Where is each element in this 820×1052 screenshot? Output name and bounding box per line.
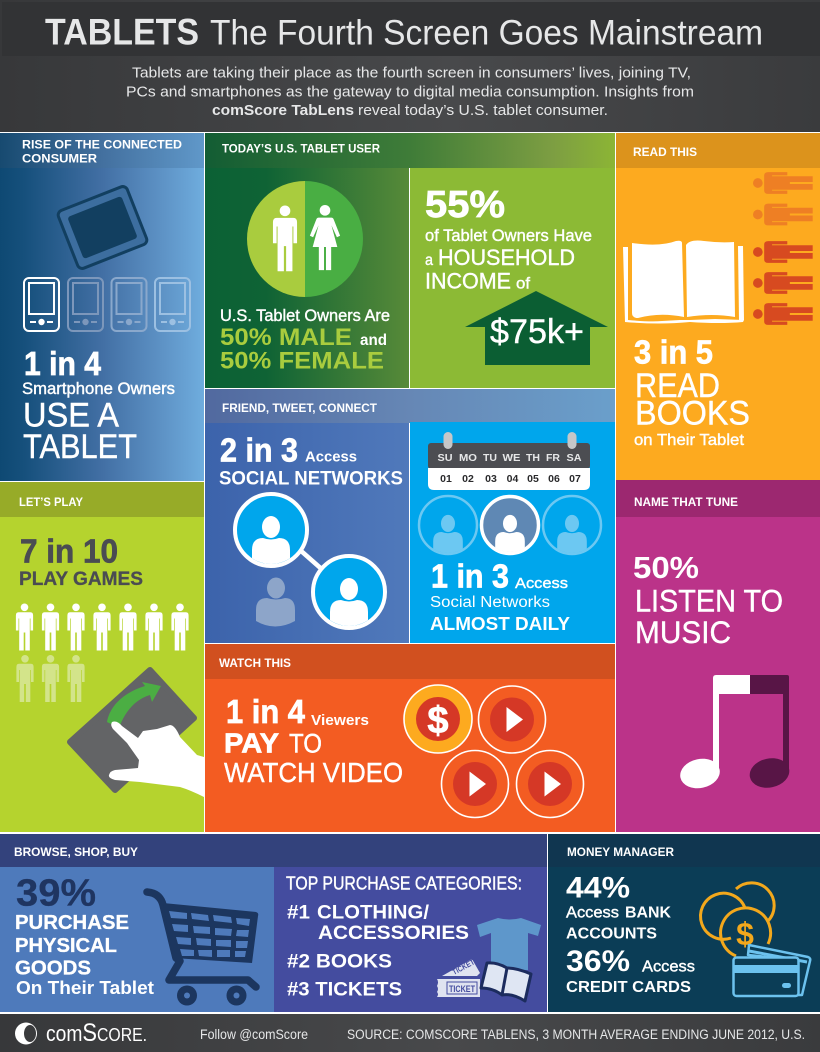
stat: 3 in 5 read books: READ [635,367,720,405]
list: top purchase categories: ACCESSORIES [318,922,469,944]
text: 50% male and 50% female: and [360,332,387,349]
icon: ten people [16,604,189,702]
follow text: Follow @comScore [200,1026,308,1042]
stat: 2 in 3 access social networks: Access [305,448,357,466]
stat: 7 in 10 play games: PLAY GAMES [19,568,143,590]
panel: let's play [0,482,204,832]
icon: gender split circle [247,181,363,297]
icon: tickets: TICKET [451,958,476,977]
stat: 7 in 10 play games [19,532,143,590]
list: top purchase categories: TOP PURCHASE CATEGORIES: [286,874,522,894]
icon: three user circles [419,496,601,555]
stat: 2 in 3 access social networks [219,432,403,490]
calendar weekdays: SA [566,452,582,464]
panel: read this [616,133,820,480]
calendar weekdays: SU [438,452,452,464]
icon: t-shirt [477,918,541,970]
stat: 1 in 4 smartphone owners use a tablet: Smartphone Owners [22,380,175,398]
intro text: Tablets are taking their place as the fourth screen in consumers’ lives, joining TV, [132,64,691,82]
list: top purchase categories: #3 TICKETS [287,979,402,1001]
heading: money manager: MONEY MANAGER [567,845,674,859]
icon: coins and credit cards [701,883,810,996]
stat: 39% purchase physical goods: GOODS [15,958,91,980]
stat: 3 in 5 read books: 3 in 5 [634,334,713,370]
calendar weekdays: TU [483,452,497,464]
list: top purchase categories: CLOTHING/ [317,902,430,924]
comScore logo: comSCORE. [46,1019,147,1047]
icon: shopping cart [147,892,258,1006]
stat: 3 in 5 read books [634,334,750,449]
header banner [0,0,820,132]
panel: friend, tweet, connect [205,389,615,643]
footer [0,1014,820,1052]
stat: 55% household income: HOUSEHOLD [438,245,575,270]
text: 50% male and 50% female [220,307,390,374]
icon: tablet [57,185,148,270]
calendar dates: 06 [548,473,560,485]
stat: 7 in 10 play games: 7 in 10 [20,532,118,570]
list: top purchase categories [286,874,522,1001]
stat: 1 in 4 viewers pay to watch video: WATCH VIDEO [224,757,403,788]
panel: money manager [548,834,820,1012]
stat: 50% listen to music: MUSIC [635,614,731,650]
title: TABLETS [45,12,199,52]
stat: 50% listen to music: LISTEN TO [635,582,783,618]
icon: tickets: TICKET [449,984,475,995]
heading: rise of the connected consumer [22,138,182,166]
icon: weekly calendar [428,432,590,490]
stat: 1 in 3 almost daily [430,558,571,634]
calendar dates: 03 [485,473,497,485]
stat: 55% household income [425,184,592,294]
stat: 1 in 4 smartphone owners use a tablet [22,345,175,466]
text: 50% male and 50% female: U.S. Tablet Owners Are [220,307,390,325]
heading: friend, tweet, connect: FRIEND, TWEET, CONNECT [222,401,378,415]
stat: 2 in 3 access social networks: 2 in 3 [220,432,298,468]
stat: 1 in 3 almost daily: Social Networks [430,594,550,611]
stat: 3 in 5 read books: on Their Tablet [634,432,745,449]
calendar weekdays [438,452,582,464]
intro text: reveal today’s U.S. tablet consumer. [358,102,608,119]
heading: watch this: WATCH THIS [219,656,291,670]
list: top purchase categories: #2 BOOKS [287,951,392,973]
stat: 39% purchase physical goods [15,872,154,998]
calendar weekdays: MO [459,452,477,464]
calendar dates: 07 [569,473,581,485]
stat: 50% listen to music: 50% [633,550,699,585]
list: top purchase categories: #1 [287,902,310,924]
stat: 39% purchase physical goods: On Their Tablet [16,978,154,998]
panel: watch this [205,644,615,832]
icon: five sideways readers [753,172,813,325]
calendar dates: 04 [507,473,518,485]
icon: music note [677,675,792,792]
stat: 1 in 4 viewers pay to watch video: PAY [224,728,279,759]
icon: hand swiping tablet [70,670,204,797]
stat: 39% purchase physical goods: PHYSICAL [15,935,117,957]
heading: read this: READ THIS [633,145,697,159]
stat: 1 in 3 almost daily: ALMOST DAILY [430,613,571,634]
stat: 44% bank accounts, 36% credit cards: CREDIT CARDS [566,979,691,996]
title: The Fourth Screen Goes Mainstream [210,14,763,52]
stat: 1 in 4 viewers pay to watch video: 1 in 4 [226,693,306,730]
heading: rise of the connected consumer: RISE OF THE CONNECTED [22,138,182,152]
heading: let's play: LET’S PLAY [19,495,83,509]
icon: tickets [437,958,480,997]
icon: coins and credit cards: $ [736,916,754,952]
stat: 1 in 4 smartphone owners use a tablet: TABLET [23,428,137,466]
stat: 1 in 3 almost daily: 1 in 3 [431,558,509,594]
calendar dates: 05 [527,473,539,485]
calendar dates [440,473,581,485]
icon: house with $75k+: $75k+ [490,313,584,351]
stat: 44% bank accounts, 36% credit cards: ACCOUNTS [566,926,657,942]
stat: 44% bank accounts, 36% credit cards: 36% [566,945,630,978]
text: 50% male and 50% female: 50% MALE [220,324,352,351]
stat: 44% bank accounts, 36% credit cards: BANK [625,904,671,922]
stat: 55% household income: INCOME [425,268,511,294]
calendar weekdays: WE [502,452,520,464]
stat: 55% household income: of Tablet Owners Have [425,227,592,245]
stat: 1 in 4 viewers pay to watch video: TO [289,729,322,759]
stat: 44% bank accounts, 36% credit cards: 44% [566,872,630,904]
icon: small book [481,963,531,1001]
intro text: PCs and smartphones as the gateway to digital media consumption. Insights from [126,84,694,100]
icon: dollar and play buttons: $ [427,700,449,742]
stat: 50% listen to music [633,550,783,650]
stat: 1 in 4 viewers pay to watch video [224,693,403,788]
panel: browse, shop, buy [0,834,547,1012]
icon: dollar and play buttons [404,685,584,818]
stat: 2 in 3 access social networks: SOCIAL NETWORKS [219,468,403,490]
panel: name that tune [616,480,820,832]
stat: 44% bank accounts, 36% credit cards: Access [566,904,619,922]
stat: 1 in 3 almost daily: Access [515,575,568,592]
icon: open book [623,240,744,324]
heading: browse, shop, buy: BROWSE, SHOP, BUY [14,845,138,859]
stat: 55% household income: of [516,276,531,292]
stat: 55% household income: a [425,252,433,269]
calendar dates: 02 [462,473,474,485]
panel: rise of the connected consumer [0,133,204,481]
stat: 1 in 4 smartphone owners use a tablet: 1 in 4 [24,345,102,382]
stat: 39% purchase physical goods: PURCHASE [15,912,129,934]
icon: house with $75k+ [465,291,608,365]
stat: 44% bank accounts, 36% credit cards [566,872,695,996]
text: 50% male and 50% female: 50% FEMALE [220,348,384,374]
intro text [126,64,694,119]
calendar weekdays: TH [526,452,540,464]
stat: 39% purchase physical goods: 39% [16,872,96,914]
heading: rise of the connected consumer: CONSUMER [22,152,97,166]
stat: 1 in 4 smartphone owners use a tablet: USE A [23,396,119,434]
panel: today's U.S. tablet user [205,133,615,388]
stat: 44% bank accounts, 36% credit cards: Access [642,958,695,976]
icon: connected people [235,494,385,630]
heading: name that tune: NAME THAT TUNE [634,495,738,509]
icon: four smartphones [24,278,190,331]
calendar weekdays: FR [546,452,560,464]
stat: 1 in 4 viewers pay to watch video: Viewers [311,712,369,729]
heading: today's U.S. tablet user: TODAY’S U.S. TABLET USER [222,142,380,156]
intro text: comScore TabLens [212,102,354,119]
calendar dates: 01 [440,473,452,485]
stat: 3 in 5 read books: BOOKS [635,394,750,432]
stat: 55% household income: 55% [425,184,505,226]
